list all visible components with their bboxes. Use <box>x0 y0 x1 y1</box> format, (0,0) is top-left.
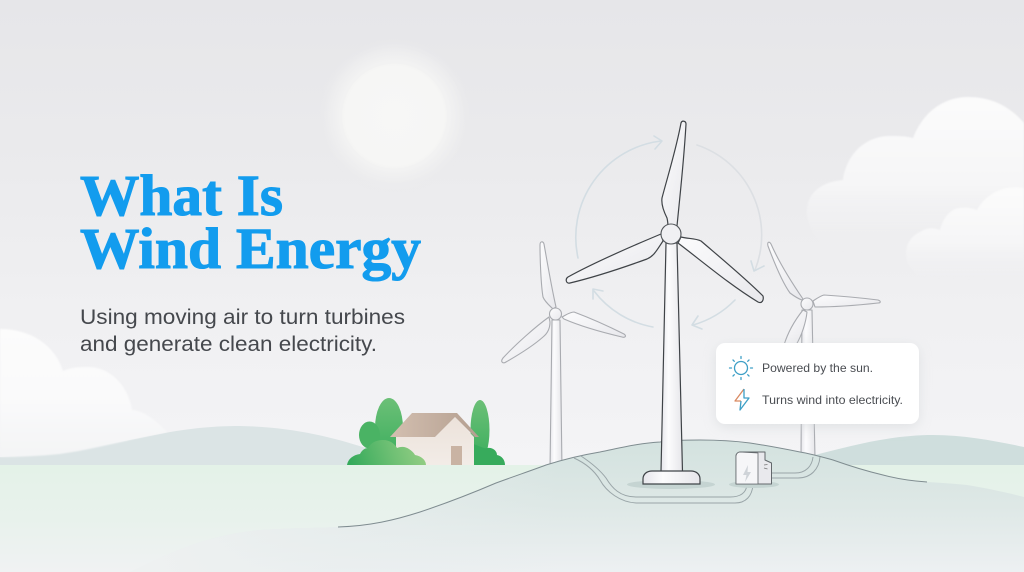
turbine: main large <box>566 121 763 489</box>
turbine: left small <box>502 242 625 470</box>
bush right <box>473 444 505 465</box>
inverter box <box>729 452 779 488</box>
bush left <box>347 440 426 465</box>
icon: bolt on inverter <box>743 465 751 482</box>
card text: Powered by the sun. <box>762 361 873 375</box>
tree: small left <box>359 422 380 448</box>
house door <box>451 446 462 465</box>
card text: Turns wind into electricity. <box>762 393 903 407</box>
blade left <box>566 234 663 283</box>
subtitle <box>80 306 405 356</box>
callout card <box>716 343 919 427</box>
card text <box>762 361 903 407</box>
foreground hill <box>130 440 1024 572</box>
light green meadow band <box>0 465 1024 572</box>
turbine: right small <box>768 242 880 458</box>
wind circulation arrows <box>576 136 764 329</box>
base shadow <box>627 480 715 489</box>
icon: sun <box>730 356 752 380</box>
house wall <box>396 417 474 465</box>
title: What Is <box>80 163 283 228</box>
subtitle: Using moving air to turn turbines <box>80 306 405 329</box>
title <box>80 163 421 281</box>
sun <box>316 38 472 194</box>
house roof <box>390 413 479 437</box>
hill left fade <box>130 452 600 572</box>
background hills <box>0 426 1024 480</box>
hub <box>661 224 681 244</box>
trees and house <box>347 398 505 465</box>
subtitle: and generate clean electricity. <box>80 333 377 356</box>
cloud: lower left <box>0 329 167 457</box>
underground cables <box>574 456 820 503</box>
cloud: upper right <box>807 97 1024 280</box>
title: Wind Energy <box>80 216 421 281</box>
icon: lightning bolt <box>735 389 749 410</box>
tree: tall right <box>470 400 490 460</box>
tower <box>661 243 682 472</box>
tree: tall left <box>375 398 403 458</box>
base <box>643 471 700 484</box>
blade right <box>678 237 763 303</box>
hill outline <box>338 440 927 527</box>
blade up <box>662 121 686 228</box>
